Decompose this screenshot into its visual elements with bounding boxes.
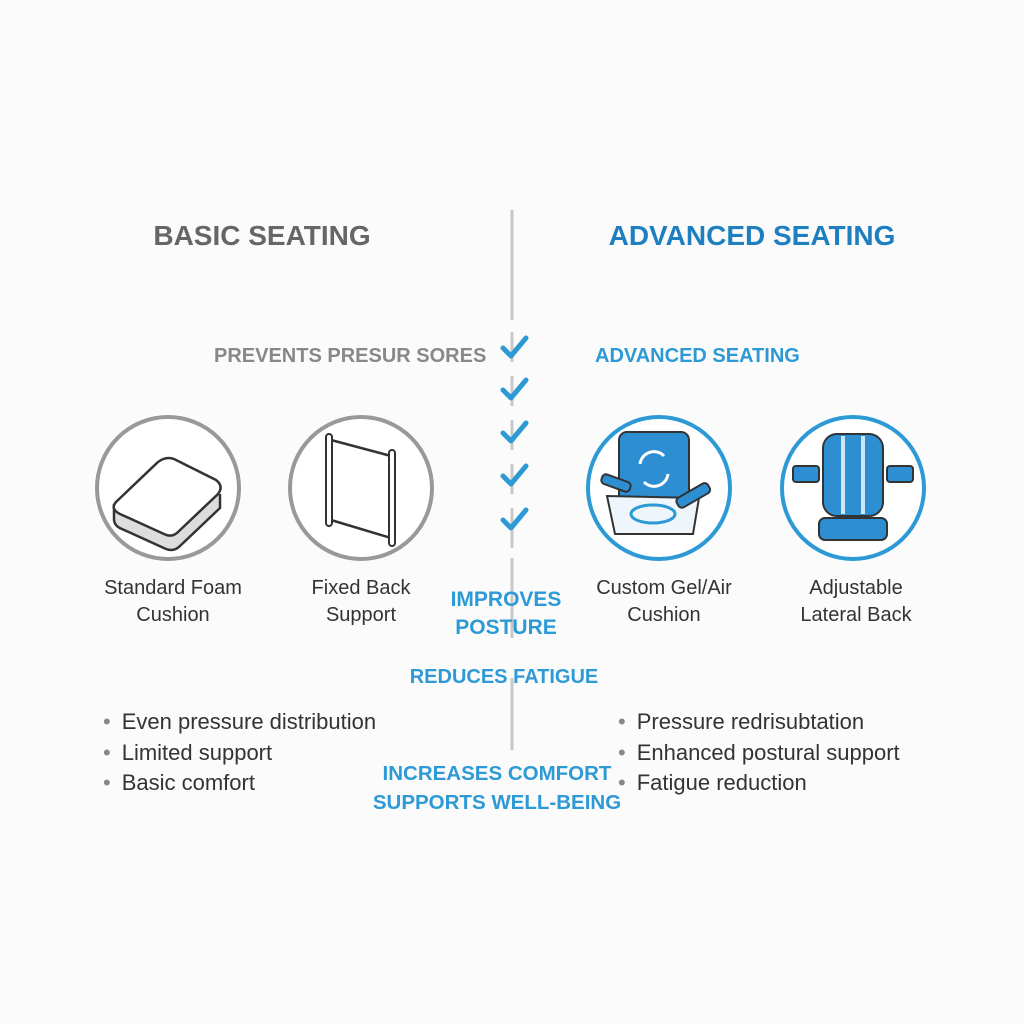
list: basic features: • Basic comfort <box>103 770 255 795</box>
label: advanced seating: ADVANCED SEATING <box>595 345 800 367</box>
label: standard foam cushion: Standard Foam <box>104 577 242 599</box>
title: advanced seating: ADVANCED SEATING <box>609 220 895 251</box>
list: advanced features <box>618 709 900 795</box>
icon: adjustable lateral back <box>780 415 926 561</box>
list: basic features: • Even pressure distribution <box>103 709 376 734</box>
label: reduces fatigue: REDUCES FATIGUE <box>410 666 598 688</box>
label: adjustable lateral back: Lateral Back <box>800 604 912 626</box>
label: adjustable lateral back: Adjustable <box>809 577 903 599</box>
list: advanced features: • Pressure redrisubtation <box>618 709 864 734</box>
label: improves posture: POSTURE <box>455 616 557 639</box>
icon: fixed back <box>288 415 434 561</box>
label: fixed back support: Support <box>326 604 396 626</box>
label: increases comfort: INCREASES COMFORT <box>383 762 611 785</box>
label: adjustable lateral back <box>800 577 912 626</box>
label: standard foam cushion <box>104 577 242 626</box>
label: custom gel/air cushion: Custom Gel/Air <box>596 577 732 599</box>
divider line <box>510 210 514 750</box>
label: increases comfort: SUPPORTS WELL-BEING <box>373 791 621 814</box>
list: advanced features: • Enhanced postural support <box>618 740 900 764</box>
icon: gel/air cushion <box>586 415 732 561</box>
label: improves posture <box>451 588 561 639</box>
label: custom gel/air cushion: Cushion <box>627 604 701 626</box>
label: improves posture: IMPROVES <box>451 588 561 611</box>
label: custom gel/air cushion <box>596 577 732 626</box>
label: fixed back support: Fixed Back <box>312 577 410 599</box>
list: basic features <box>103 709 376 795</box>
label: prevents pressure sores: PREVENTS PRESUR SORES <box>214 345 486 367</box>
label: increases comfort <box>373 762 621 814</box>
icon: checkmarks <box>500 336 528 530</box>
list: basic features: • Limited support <box>103 740 272 764</box>
list: advanced features: • Fatigue reduction <box>618 770 807 795</box>
label: standard foam cushion: Cushion <box>136 604 210 626</box>
icon: foam cushion <box>95 415 241 561</box>
title: basic seating: BASIC SEATING <box>153 220 371 251</box>
label: fixed back support <box>312 577 410 626</box>
